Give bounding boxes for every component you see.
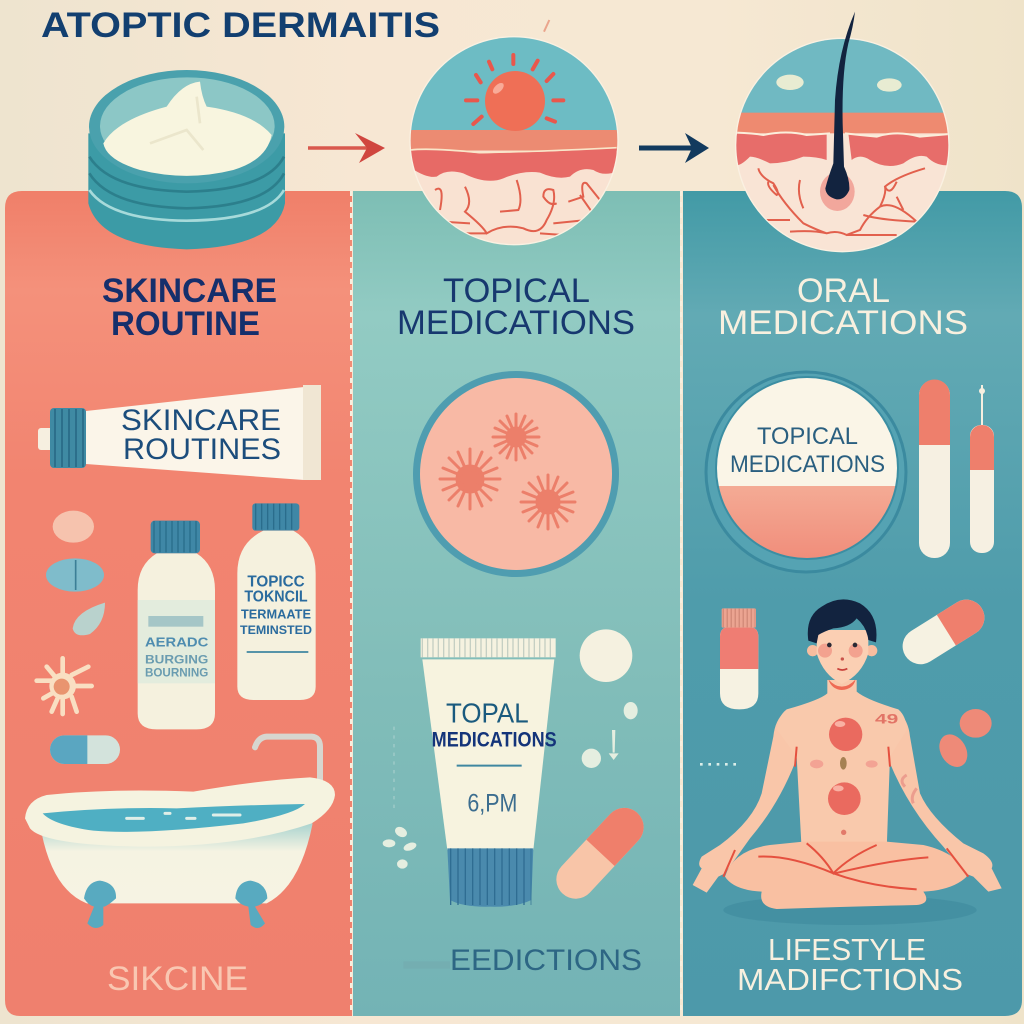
icon: skin with sun circle xyxy=(407,20,623,251)
faint dashes xyxy=(391,727,396,810)
icon: leaf tablet xyxy=(73,603,105,635)
icon: medication tube: TOPAL xyxy=(446,698,529,729)
icon: bottle 2 topical: TOPICC xyxy=(247,574,305,591)
torso xyxy=(777,680,907,850)
icon: bottle 2 topical: TERMAATE xyxy=(241,606,311,621)
head xyxy=(807,645,818,656)
icon: capsule orange xyxy=(548,800,652,907)
shadow xyxy=(723,895,977,925)
icons: meditating person and pills xyxy=(693,593,1002,925)
heading: lifestyle modifications: MADIFCTIONS xyxy=(737,962,963,997)
icon: tube skincare routines: SKINCARE xyxy=(121,404,281,437)
icon: small tablets xyxy=(934,709,992,772)
icon: tube skincare routines: ROUTINES xyxy=(123,433,281,466)
figure: meditating person xyxy=(693,599,1002,925)
icons: medication tube and pills xyxy=(383,629,652,965)
heading: lifestyle modifications: LIFESTYLE xyxy=(768,932,926,967)
icon: skin rash circle xyxy=(413,371,619,577)
heading: oral medications: MEDICATIONS xyxy=(718,304,968,342)
icon: tube skincare routines xyxy=(38,385,321,480)
icon: medication tube: 6,PM xyxy=(467,790,517,818)
icon: bottle 2 topical: TOKNCIL xyxy=(244,589,308,606)
smudge above circle xyxy=(544,20,549,32)
red lines xyxy=(723,747,968,889)
icon: bottle 2 topical xyxy=(237,503,316,700)
heading: oral medications: ORAL xyxy=(797,272,890,310)
label: skincine: SIKCINE xyxy=(107,960,248,998)
heading: skincare routine xyxy=(102,272,277,343)
label smudge xyxy=(403,954,450,976)
icon: bottle 1: BURGING xyxy=(145,652,208,666)
icon: capsule xyxy=(50,735,120,764)
rash label: 49 xyxy=(875,710,899,726)
icon: round tablet xyxy=(580,629,632,682)
icon: split tablet xyxy=(46,558,104,592)
icon: topical medications jar: MEDICATIONS xyxy=(730,451,885,478)
icon: bottle 1: AERADC xyxy=(145,635,209,650)
icon: peach blob xyxy=(53,511,94,543)
legs xyxy=(725,842,967,909)
title: ATOPTIC DERMAITIS xyxy=(41,6,440,45)
red spheres xyxy=(829,718,862,751)
icon: bottle 1 xyxy=(138,521,215,729)
heading: oral medications xyxy=(718,272,968,342)
icon: medication tube xyxy=(421,638,557,907)
icon: small tablets xyxy=(383,702,638,869)
icon: medication tube: MEDICATIONS xyxy=(432,728,557,752)
arrow: to hair follicle xyxy=(639,133,709,163)
heading: topical medications: TOPICAL xyxy=(443,272,590,310)
icon: bottle 1: BOURNING xyxy=(145,666,208,680)
label: medications: EEDICTIONS xyxy=(450,944,642,977)
icon: capsule tall xyxy=(919,379,950,558)
panel: oral medications xyxy=(683,191,1022,1016)
heading: skincare routine: ROUTINE xyxy=(111,305,260,343)
heading: topical medications: MEDICATIONS xyxy=(397,304,635,342)
icon: hair follicle circle xyxy=(733,12,953,253)
small dots xyxy=(700,760,740,768)
arms xyxy=(693,712,797,893)
heading: topical medications xyxy=(397,272,635,342)
icon: topical medications jar xyxy=(706,372,906,572)
icon: bottle 2 topical: TEMINSTED xyxy=(240,623,312,637)
icon: topical medications jar: TOPICAL xyxy=(757,423,858,450)
heading: skincare routine: SKINCARE xyxy=(102,272,277,310)
panel: topical medications xyxy=(353,191,680,1016)
icon: bathtub xyxy=(25,737,335,928)
icon: swab xyxy=(970,385,994,553)
panel: skincare routine xyxy=(5,191,352,1016)
icons: left pills, bottles and bath xyxy=(25,503,335,928)
icon: pill bottle xyxy=(720,608,758,709)
dashed divider: panels xyxy=(351,191,681,1016)
icon: sun xyxy=(37,658,92,714)
heading: lifestyle modifications xyxy=(737,932,963,997)
icon: cream jar xyxy=(88,70,285,249)
icon: capsule xyxy=(896,593,991,671)
arrow: to sun skin xyxy=(308,133,385,163)
neck line xyxy=(828,679,856,690)
